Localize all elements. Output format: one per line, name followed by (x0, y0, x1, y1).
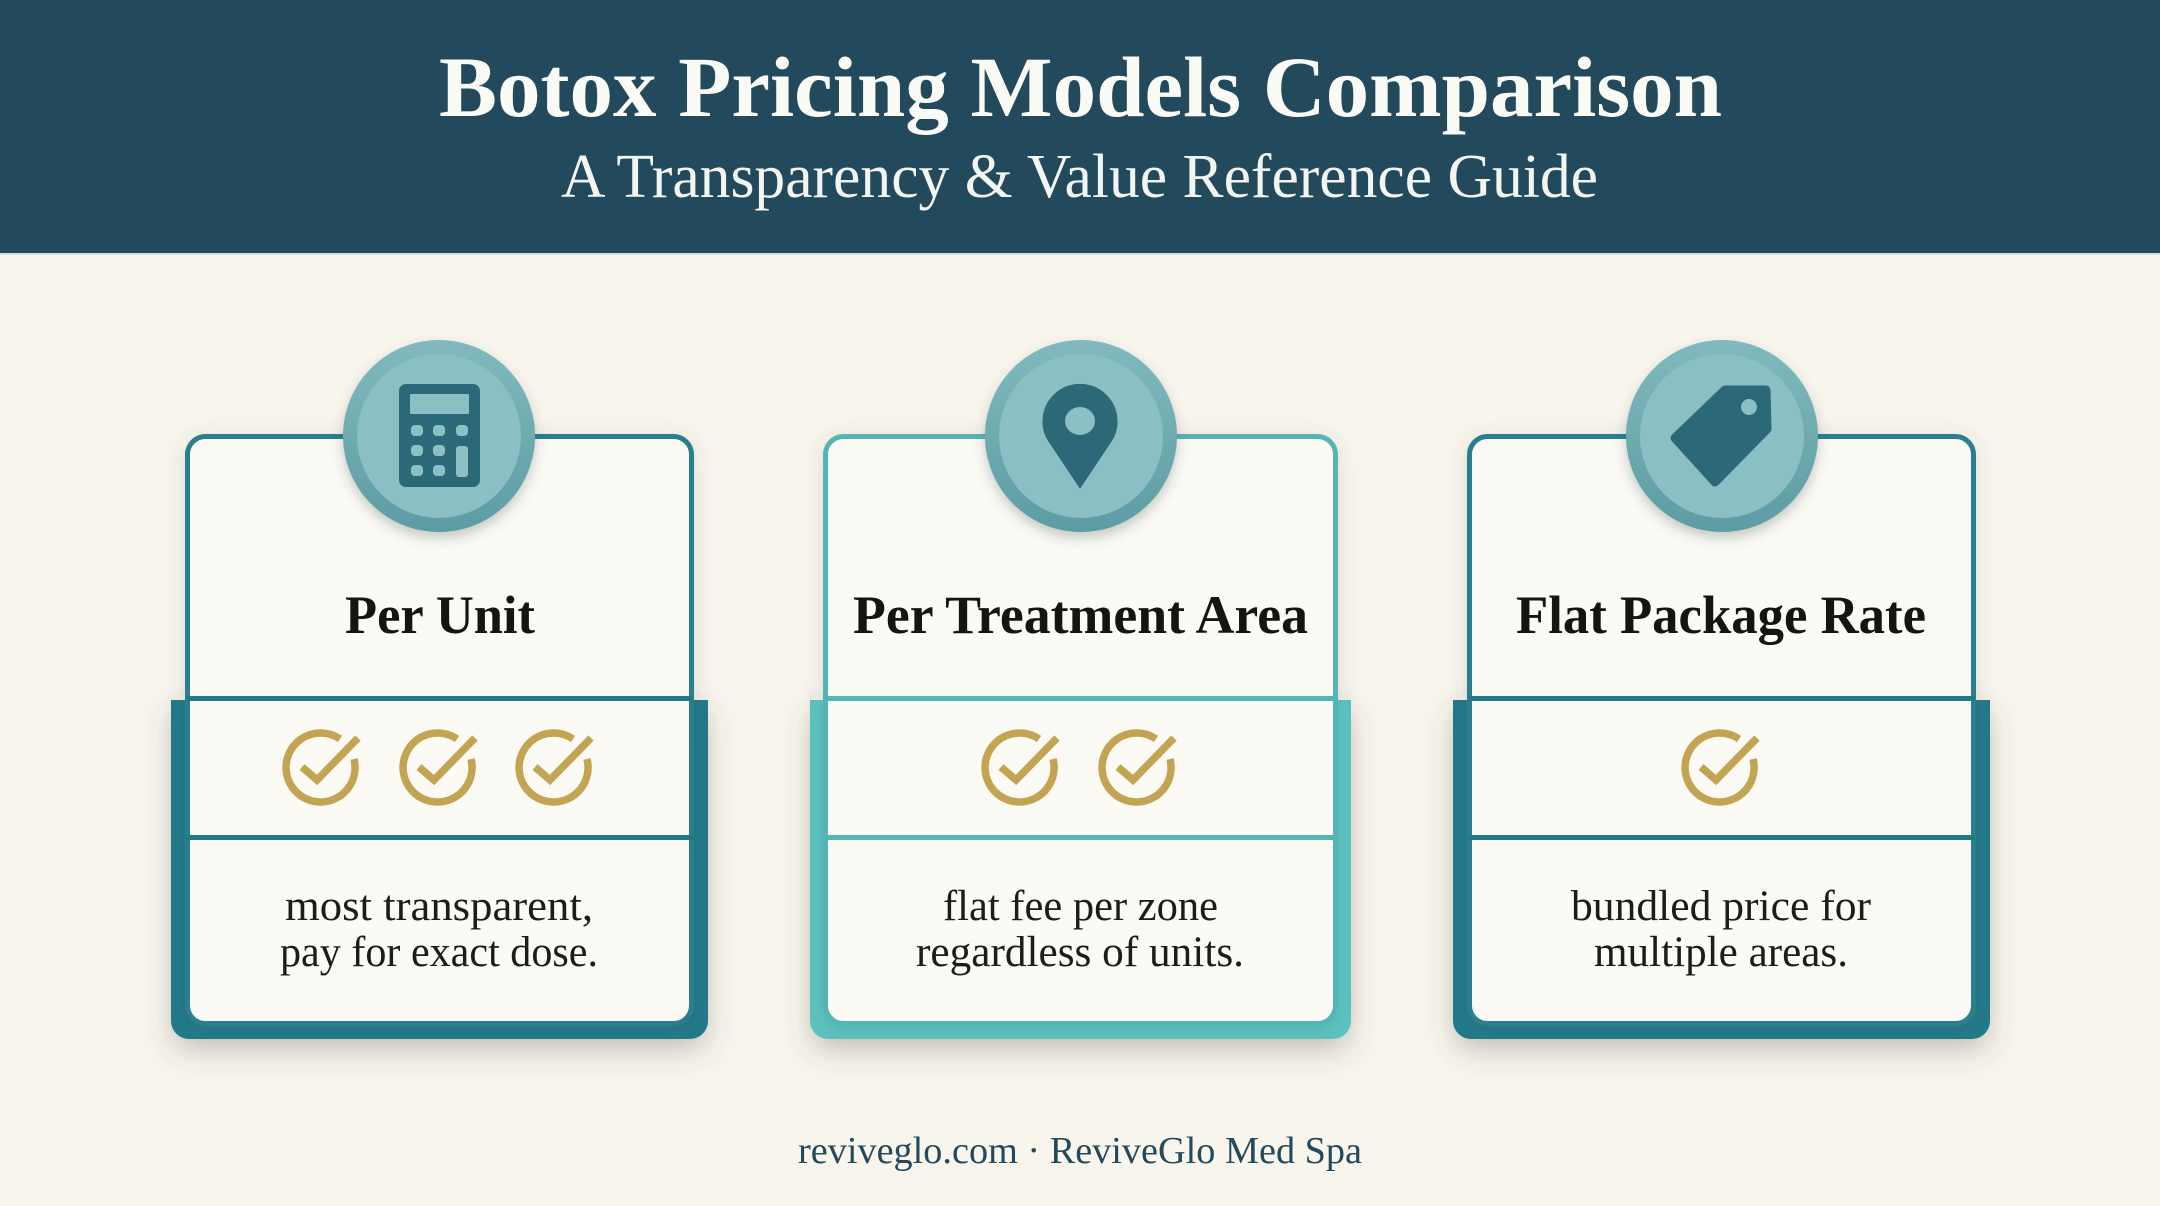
card body (171, 436, 708, 1039)
rating: three checks (286, 733, 591, 802)
panel: flat package rate (1453, 340, 1990, 1039)
description: regardless of units. (916, 929, 1244, 976)
icon: price tag (1626, 340, 1818, 532)
description: most transparent, (285, 883, 593, 930)
description: multiple areas. (1594, 929, 1848, 976)
heading: Flat Package Rate (1516, 585, 1926, 645)
card body (810, 436, 1351, 1039)
subtitle: A Transparency & Value Reference Guide (561, 143, 1598, 211)
header banner (0, 0, 2160, 255)
card body (1453, 436, 1990, 1039)
icon: location pin (985, 340, 1177, 532)
heading: Per Unit (345, 585, 535, 645)
footer: reviveglo.com · ReviveGlo Med Spa (798, 1130, 1362, 1172)
title: Botox Pricing Models Comparison (439, 39, 1722, 135)
description: bundled price for (1571, 883, 1871, 930)
description (1571, 883, 1871, 976)
panel: per unit (171, 340, 708, 1039)
description (916, 883, 1244, 976)
description: flat fee per zone (943, 883, 1218, 930)
rating: one check (1685, 733, 1757, 802)
icon: calculator (343, 340, 535, 532)
description: pay for exact dose. (280, 929, 598, 976)
description (280, 883, 598, 976)
heading: Per Treatment Area (853, 585, 1308, 645)
panel: per treatment area (810, 340, 1351, 1039)
rating: two checks (985, 733, 1174, 802)
